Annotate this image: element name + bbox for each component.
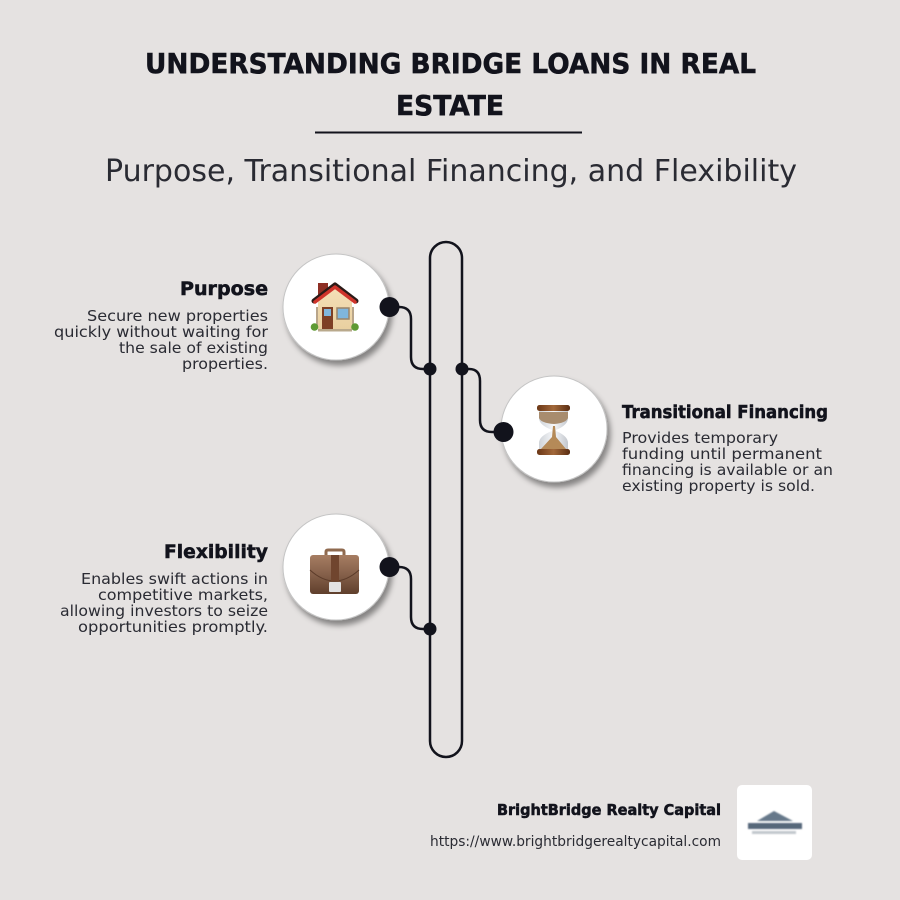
logo [737, 785, 812, 860]
heading: flexibility: Flexibility [164, 541, 269, 563]
heading: transitional financing: Transitional Financing [622, 403, 828, 423]
text: transitional financing description: financing is available or an [622, 461, 833, 479]
icon: briefcase [283, 514, 389, 620]
panel: transitional financing [456, 362, 833, 495]
text: transitional financing description: Provides temporary [622, 429, 778, 447]
text: purpose description: Secure new properties [87, 307, 268, 325]
title [145, 47, 756, 122]
text: flexibility description: opportunities promptly. [78, 618, 268, 636]
panel: purpose [54, 254, 436, 376]
panel: flexibility [60, 514, 436, 636]
text: flexibility description [60, 570, 268, 636]
text: purpose description: properties. [182, 355, 268, 373]
icon: hourglass [501, 376, 607, 482]
connector: flexibility [380, 557, 436, 636]
footer: company [430, 801, 721, 850]
text: purpose description: the sale of existing [119, 339, 268, 357]
subtitle: Purpose, Transitional Financing, and Flexibility [105, 154, 797, 189]
text: purpose description: quickly without waiting for [54, 323, 269, 341]
title: ESTATE [396, 89, 504, 122]
company url: https://www.brightbridgerealtycapital.com [430, 834, 721, 850]
icon: house [283, 254, 389, 360]
company name: BrightBridge Realty Capital [497, 801, 721, 819]
title: UNDERSTANDING BRIDGE LOANS IN REAL [145, 47, 756, 80]
text: purpose description [54, 307, 269, 373]
text: transitional financing description [622, 429, 833, 495]
connector: transitional financing [456, 362, 514, 442]
heading: purpose: Purpose [180, 278, 268, 300]
text: flexibility description: Enables swift actions in [81, 570, 268, 588]
connector: purpose [380, 297, 436, 376]
central timeline track [430, 242, 462, 757]
text: flexibility description: allowing investors to seize [60, 602, 268, 620]
text: transitional financing description: existing property is sold. [622, 477, 815, 495]
text: transitional financing description: funding until permanent [622, 445, 822, 463]
text: flexibility description: competitive markets, [98, 586, 268, 604]
